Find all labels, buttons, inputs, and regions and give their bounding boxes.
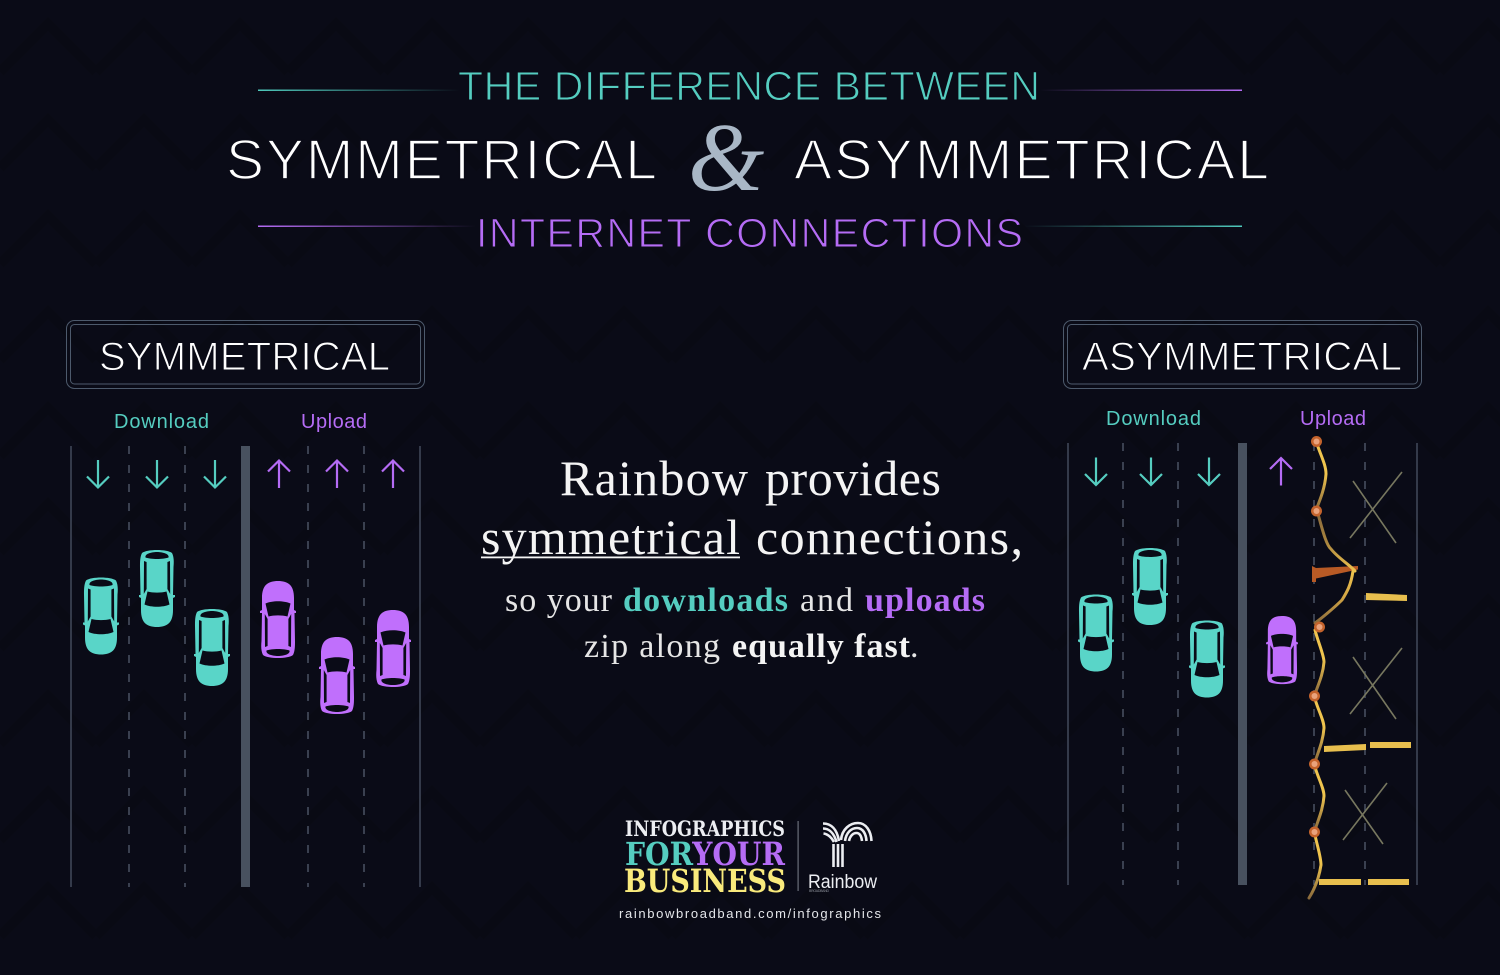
headline second line: symmetrical: [481, 509, 740, 565]
traffic cone: [1312, 566, 1358, 582]
body line one: [505, 582, 985, 619]
logo divider: [798, 821, 799, 891]
panel: center message: [481, 450, 1023, 665]
cars: upload: [260, 581, 411, 714]
crossed-out lanes: [1343, 472, 1402, 844]
title block: [226, 63, 1269, 256]
cars: download: [1078, 548, 1225, 698]
broken road line segments: [1319, 593, 1411, 885]
headline second line: [481, 509, 1023, 565]
road markings: [71, 446, 420, 887]
arrows: download lanes: [1085, 458, 1220, 485]
fallen cable: [1309, 444, 1355, 898]
arrows: upload lanes: [268, 460, 404, 488]
rainbow broadband logo: [808, 823, 877, 893]
label: download: Download: [114, 411, 209, 433]
body line one: so your: [505, 582, 613, 619]
heading box: symmetrical: SYMMETRICAL: [99, 335, 390, 379]
heading box: symmetrical: [66, 320, 424, 388]
cable nodes: [1309, 436, 1325, 838]
arrow: upload lane: [1270, 458, 1292, 486]
title line: internet connections: INTERNET CONNECTIONS: [476, 210, 1023, 256]
icon: rainbow arcs: [823, 823, 872, 867]
body line one: and: [800, 582, 853, 619]
arrows: download lanes: [87, 460, 226, 488]
panel: symmetrical: [66, 320, 424, 887]
title line: symmetrical: SYMMETRICAL: [226, 128, 657, 192]
body line two: [584, 628, 918, 665]
headline second line: connections,: [756, 509, 1023, 565]
label: download: Download: [1106, 408, 1201, 430]
logo text: infographics for your business: BUSINESS: [624, 862, 786, 900]
headline: provides: [765, 450, 941, 506]
title line: asymmetrical: ASYMMETRICAL: [794, 128, 1269, 192]
website url: rainbowbroadband.com/infographics: [619, 906, 882, 921]
body line two: zip along: [584, 628, 720, 665]
road markings: [1068, 443, 1417, 885]
headline: [560, 450, 941, 506]
car: upload: [1266, 616, 1298, 684]
body line one: downloads: [623, 582, 788, 619]
heading box: asymmetrical: [1064, 320, 1422, 388]
ampersand: &: [688, 104, 764, 212]
heading box: asymmetrical: ASYMMETRICAL: [1082, 335, 1402, 379]
body line two: .: [910, 628, 918, 665]
logo text: infographics for your business: [624, 816, 786, 900]
logo text: infographics for your business: FORYOUR: [625, 835, 785, 873]
logo text: infographics for your business: INFOGRAPHICS: [625, 816, 785, 841]
headline: Rainbow: [560, 450, 748, 506]
title line: the difference between: THE DIFFERENCE BETWEEN: [458, 63, 1040, 109]
panel: asymmetrical: [1064, 320, 1422, 898]
cars: download: [83, 550, 230, 686]
wordmark subtitle: BROADBAND: [809, 889, 829, 893]
body line two: equally fast: [732, 628, 911, 665]
label: upload: Upload: [1300, 408, 1366, 430]
body line one: uploads: [865, 582, 985, 619]
wordmark: Rainbow: [808, 872, 877, 893]
footer logos: [619, 816, 882, 921]
label: upload: Upload: [301, 411, 367, 433]
